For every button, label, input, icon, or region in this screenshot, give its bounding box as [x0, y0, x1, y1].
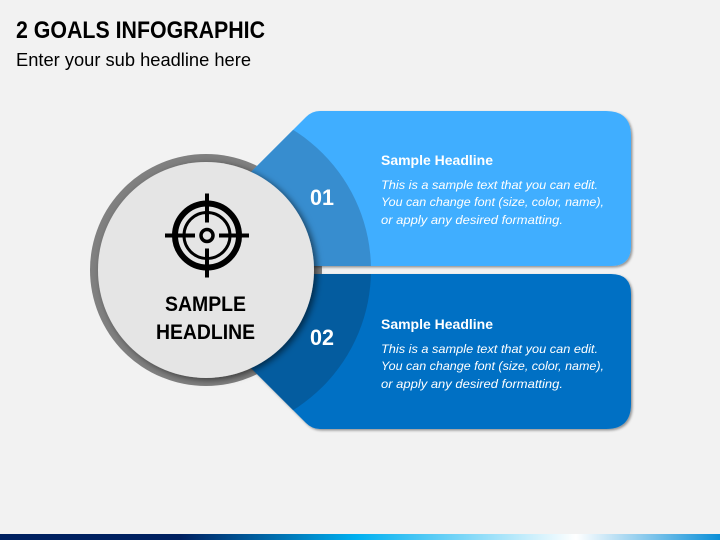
panel 02 darker arc band	[251, 274, 371, 410]
number 02: 02	[310, 325, 334, 350]
circle headline	[156, 293, 255, 344]
text block: goal 01: Sample Headline	[381, 152, 493, 168]
text block: goal 02: or apply any desired formatting.	[381, 377, 563, 391]
text block: goal 01	[381, 152, 604, 227]
subtitle: Enter your sub headline here	[16, 50, 251, 70]
text block: goal 02: Sample Headline	[381, 316, 493, 332]
circle headline: SAMPLE	[165, 293, 246, 316]
text block: goal 01: This is a sample text that you can edit.	[381, 178, 598, 192]
text block: goal 01: or apply any desired formatting.	[381, 213, 563, 227]
icon: target crosshair	[165, 194, 249, 278]
panel 02 background	[200, 274, 631, 429]
central light circle	[98, 162, 314, 378]
title: 2 GOALS INFOGRAPHIC	[16, 17, 265, 44]
panel 01 background	[200, 111, 631, 266]
text block: goal 02: You can change font (size, color, name),	[381, 359, 604, 373]
panel: goal 02	[250, 274, 634, 432]
panel 01 darker arc band	[251, 130, 371, 266]
bottom gradient strip	[0, 534, 720, 540]
text block: goal 01: You can change font (size, color, name),	[381, 195, 604, 209]
text block: goal 02	[381, 316, 604, 391]
circle outer gray ring	[90, 154, 322, 386]
text block: goal 02: This is a sample text that you can edit.	[381, 342, 598, 356]
circle headline: HEADLINE	[156, 321, 255, 344]
number 01: 01	[310, 185, 334, 210]
panel: goal 01	[251, 111, 634, 269]
